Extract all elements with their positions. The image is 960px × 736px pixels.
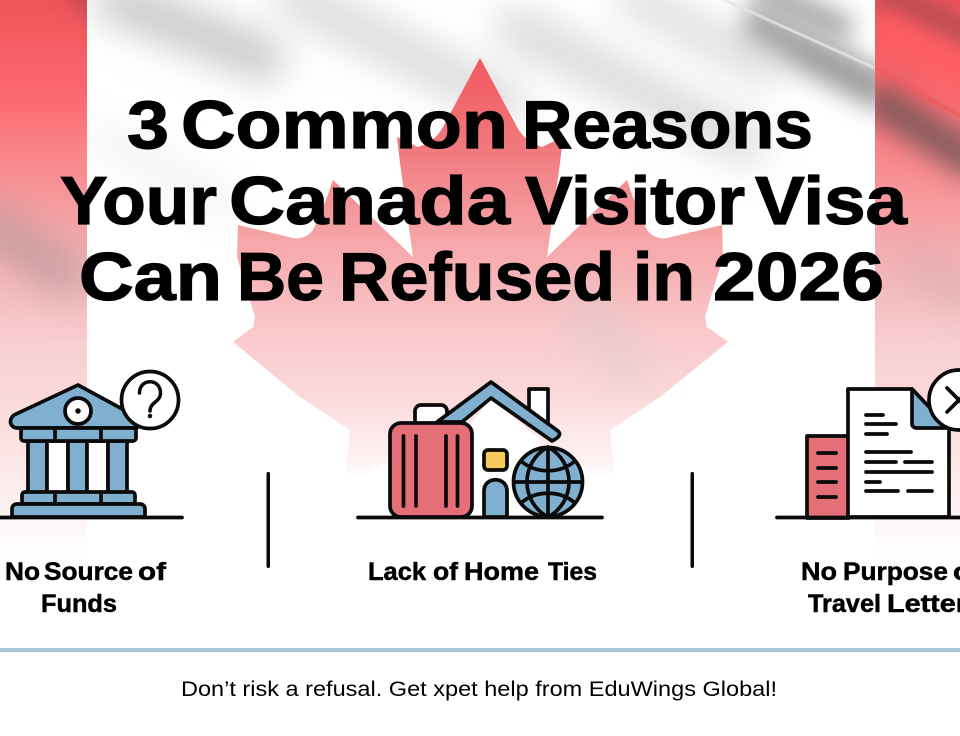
title: in xyxy=(633,239,695,315)
title: Visa xyxy=(755,163,908,239)
label: lack of home ties: Home xyxy=(464,558,539,586)
label: no source of funds: of xyxy=(138,558,167,586)
label: no purpose of travel letter: No xyxy=(801,558,837,586)
label: lack of home ties: of xyxy=(433,558,459,586)
label: no source of funds xyxy=(5,558,167,618)
maple leaf xyxy=(233,58,728,487)
title: Canada xyxy=(229,163,511,239)
title: Can xyxy=(79,239,222,315)
label: lack of home ties xyxy=(368,558,597,586)
label: no source of funds: Source xyxy=(44,558,133,586)
title: Reasons xyxy=(522,87,813,163)
title: 2026 xyxy=(713,239,884,315)
label: no purpose of travel letter: Purpose xyxy=(843,558,948,586)
label: no purpose of travel letter: Travel xyxy=(808,590,881,618)
label: lack of home ties: Ties xyxy=(548,558,597,586)
title: Your xyxy=(60,163,217,239)
footer rule xyxy=(0,648,960,652)
icon: suitcase, house and globe xyxy=(358,382,602,518)
title: Visitor xyxy=(525,163,745,239)
title: Refused xyxy=(339,239,615,315)
label: no purpose of travel letter xyxy=(801,558,960,618)
title: Be xyxy=(237,239,324,315)
label: no source of funds: No xyxy=(5,558,40,586)
icon: document with cross xyxy=(777,370,960,518)
title xyxy=(60,87,908,315)
footer text: Don’t risk a refusal. Get xpet help from EduWings Global! xyxy=(181,678,777,701)
label: no purpose of travel letter: Letter xyxy=(887,590,960,618)
divider left xyxy=(266,472,270,568)
title: 3 xyxy=(127,87,169,163)
icon: bank with question mark xyxy=(0,372,182,518)
label: no source of funds: Funds xyxy=(41,590,117,618)
label: lack of home ties: Lack xyxy=(368,558,426,586)
title: Common xyxy=(181,87,508,163)
divider right xyxy=(690,472,694,568)
flag background xyxy=(0,0,960,528)
